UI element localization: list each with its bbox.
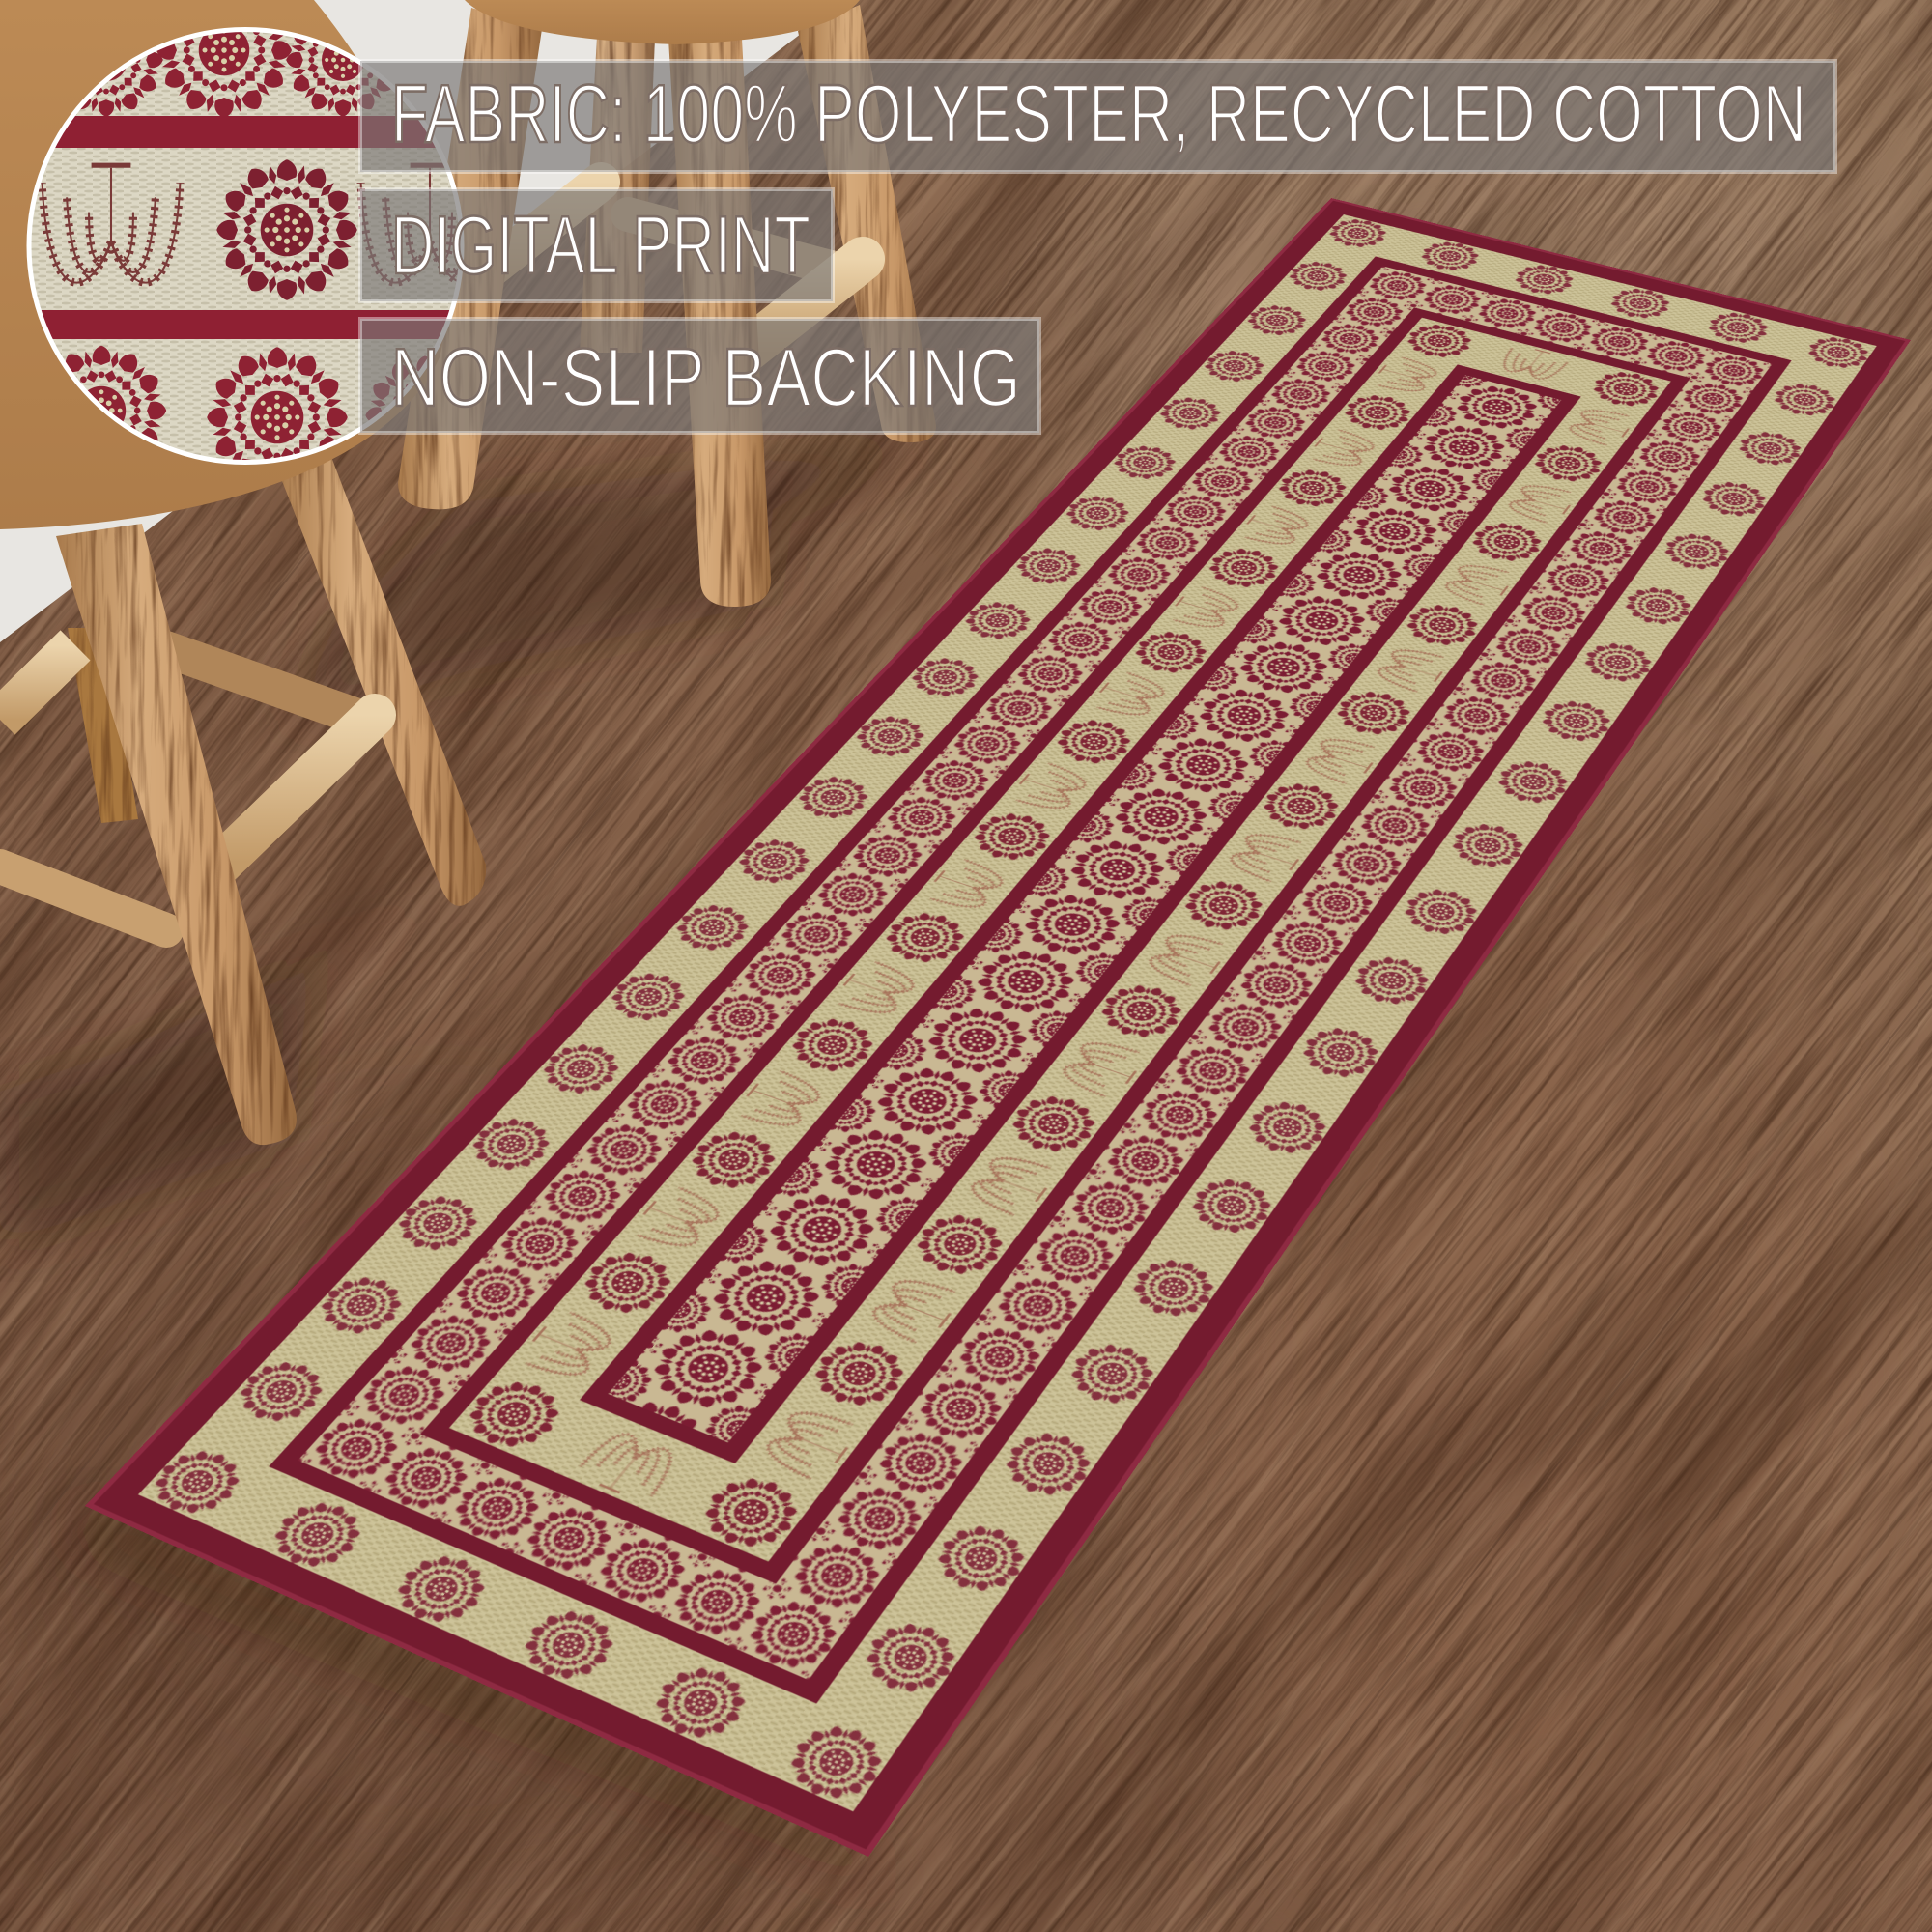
detail circle	[27, 27, 464, 465]
banner: digital print	[360, 189, 833, 301]
back stool	[398, 0, 936, 607]
outer cream band	[138, 214, 1877, 1811]
fabric close-up medallion	[215, 158, 358, 301]
third frame	[420, 307, 1690, 1583]
inner band medallions	[451, 319, 1669, 1560]
centre frame	[580, 364, 1581, 1463]
lace band	[298, 266, 1773, 1680]
banner: non-slip backing	[360, 319, 1039, 433]
fabric close-up willow	[43, 165, 498, 283]
inner cream band	[449, 318, 1671, 1562]
banner: non-slip backing: NON-SLIP BACKING	[391, 332, 1021, 424]
outer band medallions	[137, 214, 1877, 1812]
willow trees	[459, 321, 1664, 1553]
banner: digital print: DIGITAL PRINT	[391, 200, 810, 292]
front stool	[0, 0, 486, 1145]
fabric close-up lace	[27, 27, 454, 465]
overlay: detail circle and feature banners	[27, 27, 1837, 465]
second frame	[269, 256, 1792, 1704]
fabric close-up bands	[19, 116, 473, 339]
centre lace field	[608, 375, 1561, 1442]
